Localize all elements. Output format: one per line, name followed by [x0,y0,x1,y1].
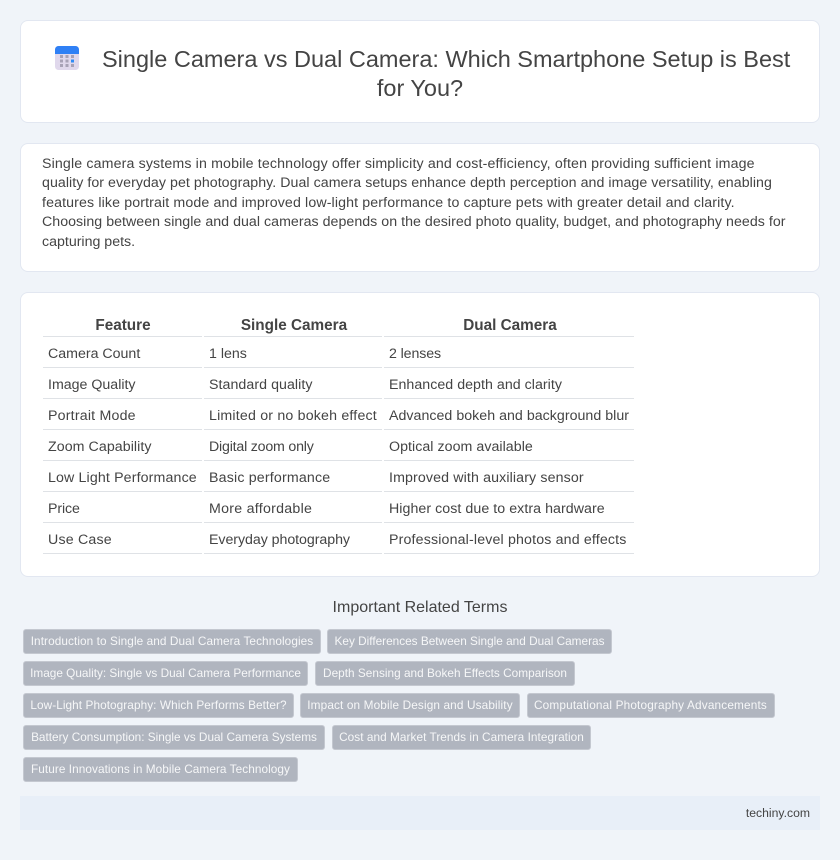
table row: price: Higher cost due to extra hardware [389,501,605,517]
table row: image quality: Standard quality [209,377,312,393]
table row: camera count: Camera Count [48,346,140,362]
tag [300,693,520,718]
table row: low light performance [43,470,634,492]
title: Single Camera vs Dual Camera: Which Smartphone Setup is Best [102,46,790,72]
table row: camera count [43,346,634,368]
tag: Introduction to Single and Dual Camera Technologies [31,634,313,648]
table row: camera count: 2 lenses [389,346,441,362]
table row: use case: Everyday photography [209,532,350,548]
table row: price: Price [48,501,80,517]
table header [43,317,634,337]
tag: Impact on Mobile Design and Usability [307,698,513,712]
tag: Cost and Market Trends in Camera Integration [339,730,584,744]
footer [20,796,820,830]
panel: related term tags [23,629,775,782]
icon: calendar [55,46,79,70]
text block: introduction: Choosing between single and dual cameras depends on the desired photo quality, budget, and photography needs for [42,214,786,230]
table row: low light performance: Low Light Performance [48,470,197,486]
table row: image quality: Image Quality [48,377,136,393]
tag: Key Differences Between Single and Dual Cameras [335,634,604,648]
table header: Feature [95,317,151,334]
table row: low light performance: Improved with auxiliary sensor [389,470,584,486]
tag [327,629,612,654]
tag: Computational Photography Advancements [534,698,767,712]
table row: use case: Professional-level photos and effects [389,532,627,548]
heading: important related terms: Important Related Terms [333,599,507,616]
tag [332,725,591,750]
panel: introduction [20,143,820,272]
table row: price: More affordable [209,501,312,517]
table row: zoom capability: Zoom Capability [48,439,152,455]
table row: zoom capability: Digital zoom only [209,439,314,455]
panel: title header [20,20,820,123]
table row: zoom capability: Optical zoom available [389,439,533,455]
tag [23,725,325,750]
title: for You? [377,75,463,101]
footer text: techiny.com: techiny.com [746,806,810,820]
text block: introduction: capturing pets. [42,234,135,250]
table row: portrait mode: Advanced bokeh and background blur [389,408,629,424]
tag: Low-Light Photography: Which Performs Better? [30,698,287,712]
tag [23,757,298,782]
tag: Future Innovations in Mobile Camera Technology [31,762,290,776]
tag [23,629,321,654]
table row: use case: Use Case [48,532,112,548]
text block: introduction [42,156,786,250]
table row: portrait mode: Limited or no bokeh effect [209,408,377,424]
table row: image quality [43,377,634,399]
text block: introduction: quality for everyday pet photography. Dual camera setups enhance depth perception and image versatility, enabling [42,175,772,191]
table row: zoom capability [43,439,634,461]
text block: introduction: features like portrait mode and improved low-light performance to capture pets with greater detail and clarity. [42,195,735,211]
table row: image quality: Enhanced depth and clarity [389,377,562,393]
tag: Battery Consumption: Single vs Dual Camera Systems [31,730,317,744]
tag: Image Quality: Single vs Dual Camera Performance [30,666,301,680]
table header: Single Camera [241,317,347,334]
table row: low light performance: Basic performance [209,470,330,486]
tag [315,661,575,686]
table row: portrait mode [43,408,634,430]
table header: Dual Camera [463,317,557,334]
tag [23,661,308,686]
table row: portrait mode: Portrait Mode [48,408,136,424]
text block: introduction: Single camera systems in mobile technology offer simplicity and cost-efficiency, often providing sufficient image [42,156,755,172]
table row: camera count: 1 lens [209,346,247,362]
title [102,46,790,101]
tag [23,693,294,718]
tag [526,693,774,718]
table row: price [43,501,634,523]
panel: comparison table [20,292,820,577]
table row: use case [43,532,634,554]
tag: Depth Sensing and Bokeh Effects Comparison [323,666,567,680]
